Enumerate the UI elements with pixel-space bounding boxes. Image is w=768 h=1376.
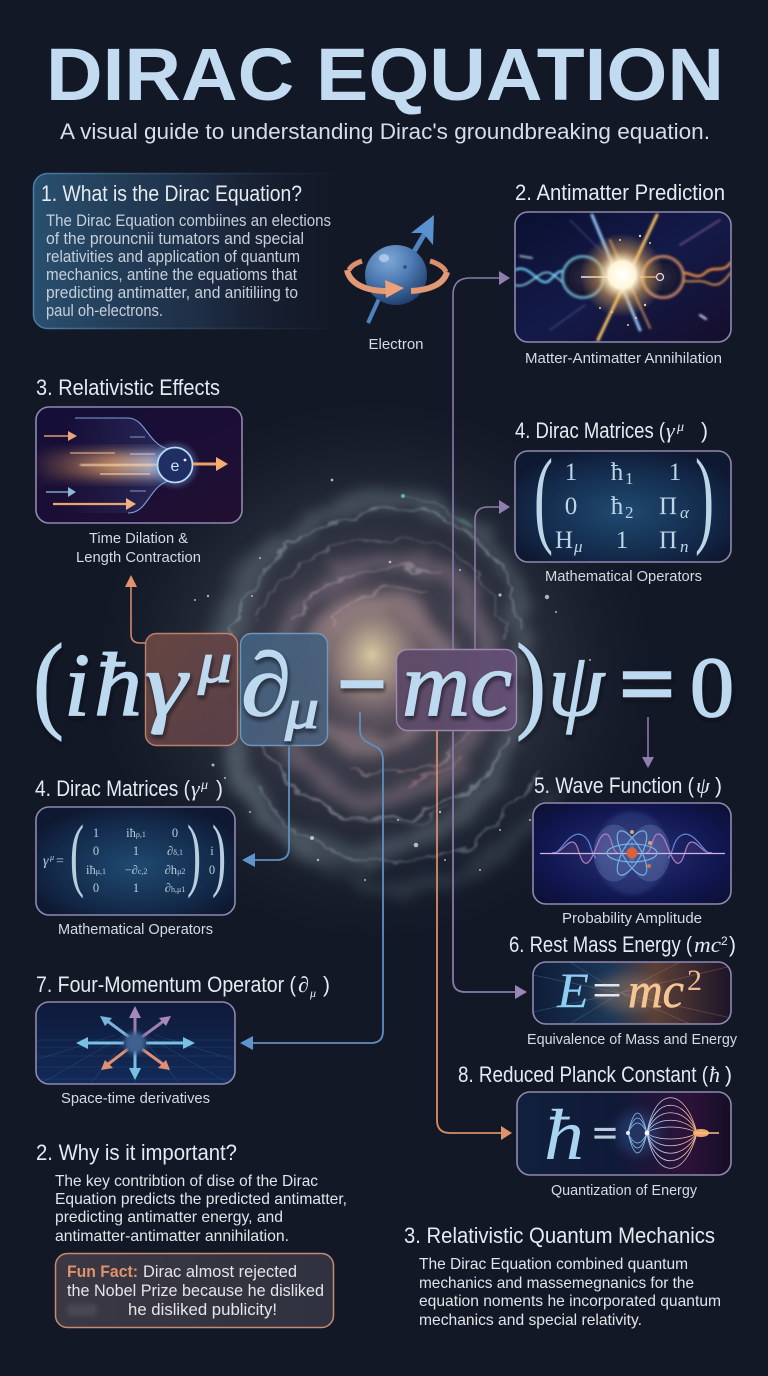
heading: 6. Rest Mass Energy ( — [509, 932, 693, 957]
highlight: gamma box — [146, 634, 238, 746]
matrix: i — [210, 844, 214, 858]
heading: ) — [216, 776, 223, 801]
body text: what is: of the prouncnii tumators and special — [46, 230, 304, 248]
panel: why is it important — [36, 1140, 347, 1328]
equation: μ — [197, 630, 232, 695]
matrix: 0 — [93, 881, 99, 895]
icon: electron — [347, 215, 447, 323]
caption: Mathematical Operators — [545, 568, 702, 585]
arrow: mc to rest mass energy — [453, 731, 527, 999]
heading: 3. Relativistic Effects — [36, 375, 220, 400]
body text: what is: The Dirac Equation combiines an elections — [46, 212, 331, 230]
illustration: E equals mc squared: E — [556, 962, 589, 1018]
equation: = — [620, 635, 674, 734]
panel: wave function — [533, 773, 731, 927]
panel: Dirac matrices (right) — [515, 418, 731, 585]
heading: ) — [701, 418, 708, 443]
matrix: ∂δ,1 — [167, 844, 183, 858]
matrix: μ — [49, 853, 54, 862]
heading: 3. Relativistic Quantum Mechanics — [404, 1223, 715, 1248]
panel: antimatter prediction — [515, 180, 731, 367]
highlight: partial box — [240, 634, 328, 746]
matrix: 0 — [93, 844, 99, 858]
matrix: Π — [659, 493, 677, 520]
heading: μ — [676, 420, 684, 435]
title: DIRAC EQUATION — [46, 33, 724, 116]
caption: Mathematical Operators — [58, 921, 213, 938]
equation: i — [64, 636, 90, 735]
heading: 8. Reduced Planck Constant ( — [458, 1062, 709, 1087]
matrix: 1 — [616, 527, 628, 554]
heading: what is: 1. What is the Dirac Equation? — [41, 181, 302, 206]
caption: electron: Electron — [368, 336, 424, 353]
illustration: h-bar and oscillations — [517, 1092, 731, 1175]
heading: μ — [200, 778, 208, 793]
equation: γ — [145, 636, 190, 735]
highlight: mc box — [396, 650, 516, 730]
caption: Probability Amplitude — [562, 910, 702, 927]
illustration: h-bar and oscillations: ħ — [544, 1095, 584, 1175]
body text: what is: relativities and application of quantum — [46, 248, 300, 266]
heading: 2. Why is it important? — [36, 1140, 237, 1165]
callout: fun fact: Dirac almost rejected — [143, 1262, 297, 1281]
equation: ∂ — [241, 636, 291, 735]
heading: γ — [191, 776, 201, 801]
body text: what is — [46, 212, 331, 320]
matrix: 1 — [625, 469, 634, 488]
illustration: h-bar and oscillations: = — [593, 1113, 617, 1155]
matrix: 1 — [133, 844, 139, 858]
body text: The Dirac Equation combined quantum — [419, 1256, 688, 1273]
panel: relativistic effects — [36, 375, 242, 566]
matrix: α — [680, 503, 690, 522]
callout: fun fact: the Nobel Prize because he disliked — [67, 1281, 324, 1300]
callout: fun fact — [56, 1254, 334, 1328]
matrix: ( — [534, 438, 553, 557]
body text: mechanics and massemegnanics for the — [419, 1275, 694, 1292]
caption: Quantization of Energy — [551, 1182, 697, 1199]
body text: mechanics and special relativity. — [419, 1312, 642, 1329]
heading: 7. Four-Momentum Operator ( — [36, 972, 297, 997]
arrow: gamma to relativistic effects — [125, 575, 147, 643]
body text: equation noments he incorporated quantum — [419, 1293, 721, 1310]
matrix — [515, 438, 731, 562]
heading: 2. Antimatter Prediction — [515, 180, 725, 205]
matrix: μ — [573, 537, 583, 556]
callout: fun fact: he disliked publicity! — [128, 1300, 277, 1319]
panel: four-momentum operator — [36, 972, 330, 1107]
matrix: ∂h,μ1 — [165, 881, 185, 895]
illustration: length contraction: e — [171, 458, 180, 475]
illustration: E equals mc squared: mc — [628, 962, 684, 1018]
matrix: ) — [212, 808, 226, 899]
body text: antimatter-antimatter annihilation. — [55, 1228, 289, 1245]
equation: ψ — [548, 636, 606, 735]
arrow: mc to matrices — [475, 500, 510, 650]
body text: predicting antimatter energy, and — [55, 1209, 283, 1226]
matrix: 0 — [172, 826, 178, 840]
equation: 0 — [690, 639, 734, 735]
matrix: 1 — [133, 881, 139, 895]
matrix: ) — [187, 808, 201, 899]
body text — [419, 1256, 721, 1329]
heading: ) — [715, 773, 722, 798]
illustration: four-momentum arrows — [36, 1002, 235, 1084]
arrow: minus to four-momentum — [240, 712, 383, 1050]
illustration: E equals mc squared — [533, 962, 731, 1024]
matrix: n — [680, 537, 688, 556]
illustration: annihilation — [515, 212, 731, 342]
heading: 4. Dirac Matrices ( — [515, 418, 666, 443]
heading: ∂ — [298, 972, 309, 997]
heading: ) — [729, 932, 736, 957]
matrix: 0 — [209, 863, 215, 877]
caption — [76, 530, 201, 566]
matrix: 2 — [625, 503, 634, 522]
panel: reduced Planck constant — [458, 1062, 732, 1199]
subtitle: A visual guide to understanding Dirac's groundbreaking equation. — [60, 119, 710, 144]
matrix: iħρ,1 — [126, 826, 146, 840]
matrix: H — [555, 527, 573, 554]
matrix: = — [56, 854, 64, 869]
matrix: γ — [43, 854, 49, 869]
illustration: atom and wave — [533, 803, 731, 904]
caption: Time Dilation & — [89, 530, 188, 547]
matrix: ( — [70, 808, 84, 899]
caption: Equivalence of Mass and Energy — [527, 1031, 737, 1048]
panel: Dirac matrices (left) — [35, 776, 235, 938]
equation: ħ — [94, 636, 142, 735]
matrix: Π — [659, 527, 677, 554]
caption: Matter-Antimatter Annihilation — [525, 350, 722, 367]
caption: Length Contraction — [76, 549, 201, 566]
matrix: 1 — [565, 459, 577, 486]
heading: μ — [309, 986, 316, 1000]
heading: 2 — [721, 934, 728, 948]
matrix: ħ — [611, 493, 624, 520]
body text: what is: paul oh-electrons. — [46, 302, 163, 320]
caption: Space-time derivatives — [61, 1090, 210, 1107]
matrix: iħμ,1 — [86, 863, 106, 877]
panel: rest mass energy — [509, 932, 737, 1048]
body text: what is: mechanics, antine the equatioms that — [46, 266, 297, 284]
illustration: E equals mc squared: = — [592, 962, 622, 1018]
matrix: 1 — [93, 826, 99, 840]
arrow: partial to left matrices — [242, 746, 289, 867]
heading: γ — [666, 418, 676, 443]
arrow: psi to wave function — [642, 717, 654, 768]
heading: ) — [323, 972, 330, 997]
stars — [194, 479, 591, 881]
heading: 4. Dirac Matrices ( — [35, 776, 191, 801]
illustration: length contraction — [36, 407, 242, 523]
equation: ( — [33, 623, 64, 742]
illustration: E equals mc squared: 2 — [687, 964, 702, 997]
arrow: mc to antimatter — [453, 271, 510, 650]
galaxy background — [90, 395, 660, 945]
body text: Equation predicts the predicted antimatter, — [55, 1191, 347, 1208]
matrix: ∂hμ2 — [165, 863, 185, 877]
equation: ) — [516, 623, 546, 742]
matrix: −∂c,2 — [125, 863, 147, 877]
matrix: ) — [695, 438, 714, 557]
body text: The key contribtion of dise of the Dirac — [55, 1173, 318, 1190]
panel: relativistic quantum mechanics — [404, 1223, 721, 1329]
body text — [55, 1173, 347, 1245]
panel: what is the Dirac equation — [34, 174, 344, 328]
matrix — [36, 807, 235, 915]
callout: fun fact: Fun Fact: — [67, 1262, 138, 1281]
matrix: ħ — [611, 459, 624, 486]
heading: 5. Wave Function ( — [534, 773, 695, 798]
matrix: 0 — [565, 493, 577, 520]
body text: what is: predicting antimatter, and anitiliing to — [46, 284, 298, 302]
equation: mc — [402, 633, 512, 735]
heading: ħ — [709, 1062, 720, 1087]
heading: ψ — [696, 773, 710, 798]
equation: − — [338, 635, 386, 734]
heading: mc — [694, 932, 721, 957]
equation: μ — [284, 676, 319, 741]
equation — [33, 623, 734, 742]
arrow: mc to reduced Planck constant — [437, 731, 512, 1140]
heading: ) — [725, 1062, 732, 1087]
matrix: 1 — [669, 459, 681, 486]
